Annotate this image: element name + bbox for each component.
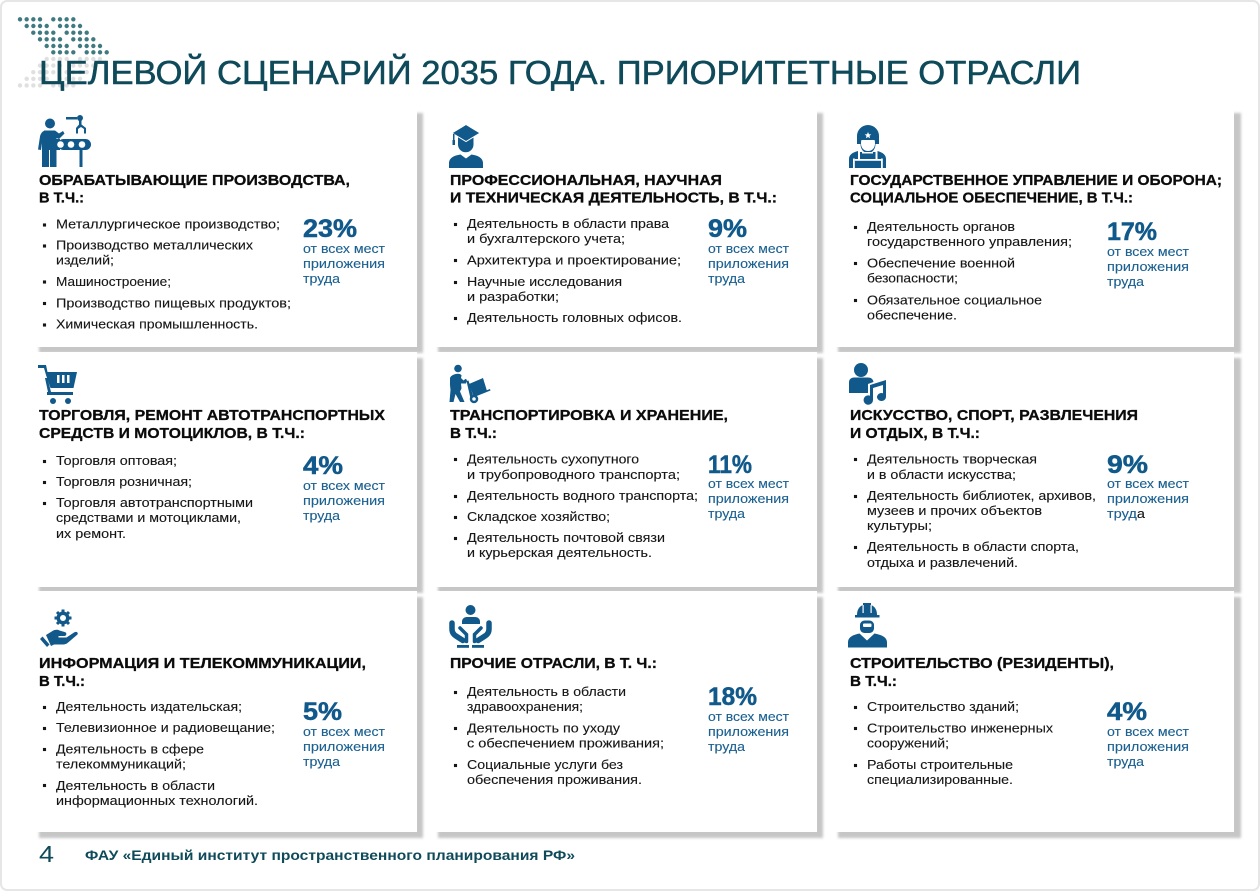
list: и в области искусства;: [867, 467, 1016, 482]
stat: 4%: [303, 452, 343, 480]
list: Деятельность сухопутного: [467, 452, 639, 466]
list: обеспечение.: [867, 308, 957, 322]
list: Деятельность водного транспорта;: [467, 488, 698, 503]
heading: [450, 407, 728, 442]
heading: ГОСУДАРСТВЕННОЕ УПРАВЛЕНИЕ И ОБОРОНА;: [850, 172, 1222, 189]
heading: В Т.Ч.:: [450, 425, 497, 442]
stat: 9%: [1107, 451, 1148, 479]
heading: ТОРГОВЛЯ, РЕМОНТ АВТОТРАНСПОРТНЫХ: [39, 407, 385, 424]
icon: graduate: [449, 124, 483, 168]
stat: приложения: [708, 724, 789, 739]
stat: 23%: [303, 215, 357, 243]
heading: СОЦИАЛЬНОЕ ОБЕСПЕЧЕНИЕ, В Т.Ч.:: [850, 190, 1133, 206]
stat: от всех мест: [1107, 244, 1189, 259]
icon: soldier: [849, 125, 886, 168]
list: Деятельность органов: [867, 219, 1015, 234]
list: средствами и мотоциклами,: [56, 510, 241, 525]
list: [454, 216, 682, 325]
stat: труда: [1107, 754, 1145, 769]
stat: от всех мест: [708, 241, 789, 256]
list: специализированные.: [867, 772, 1013, 787]
stat: 18%: [708, 683, 757, 711]
list: Торговля автотранспортными: [56, 495, 253, 510]
title: ЦЕЛЕВОЙ СЦЕНАРИЙ 2035 ГОДА. ПРИОРИТЕТНЫЕ ОТРАСЛИ: [39, 54, 1081, 91]
list: [454, 452, 698, 560]
stat: приложения: [303, 256, 385, 271]
list: Социальные услуги без: [467, 757, 623, 772]
heading: [850, 655, 1114, 690]
stat: [708, 451, 789, 521]
list: отдыха и развлечений.: [867, 555, 1018, 570]
stat: труда: [708, 739, 746, 754]
list: Деятельность почтовой связи: [467, 530, 665, 545]
stat: от всех мест: [303, 724, 385, 739]
stat: [1107, 451, 1189, 521]
stat: 11%: [708, 451, 752, 479]
stat: приложения: [303, 739, 385, 754]
list: Торговля розничная;: [56, 474, 192, 489]
icon: mover with cart: [450, 365, 490, 402]
stat: от всех мест: [1107, 476, 1189, 491]
stat: 9%: [708, 215, 747, 243]
list: и разработки;: [467, 289, 559, 304]
list: Обязательное социальное: [867, 292, 1042, 308]
list: Деятельность в области: [56, 778, 215, 793]
list: их ремонт.: [56, 526, 126, 541]
list: Деятельность в области: [467, 684, 626, 699]
list: Деятельность библиотек, архивов,: [867, 488, 1096, 503]
list: Производство металлических: [56, 238, 254, 252]
stat: труда: [708, 506, 746, 521]
list: с обеспечением проживания;: [467, 736, 664, 750]
stat: труда: [303, 754, 341, 769]
list: Обеспечение военной: [867, 256, 1015, 270]
list: Строительство зданий;: [867, 699, 1019, 714]
list: здравоохранения;: [467, 699, 583, 714]
list: Деятельность творческая: [867, 452, 1037, 466]
heading: И ТЕХНИЧЕСКАЯ ДЕЯТЕЛЬНОСТЬ, В Т.Ч.:: [450, 190, 777, 206]
heading: В Т.Ч.:: [39, 673, 85, 690]
stat: приложения: [708, 491, 789, 506]
stat: от всех мест: [708, 709, 789, 724]
list: обеспечения проживания.: [467, 772, 642, 787]
stat: труда: [708, 271, 746, 286]
list: [43, 699, 275, 808]
stat: [1107, 218, 1189, 289]
stat: 17%: [1107, 218, 1157, 246]
list: [43, 453, 253, 541]
heading: ПРОЧИЕ ОТРАСЛИ, В Т. Ч.:: [450, 655, 657, 672]
footer text: ФАУ «Единый институт пространственного планирования РФ»: [85, 847, 575, 863]
stat: приложения: [708, 256, 789, 271]
list: [454, 684, 664, 787]
list: телекоммуникаций;: [56, 756, 186, 772]
list: [854, 452, 1096, 570]
panel: IT: [33, 591, 423, 838]
list: государственного управления;: [867, 234, 1072, 249]
heading: [850, 407, 1138, 442]
icon: hand with gear: [40, 610, 78, 647]
list: Деятельность в области спорта,: [867, 539, 1079, 554]
icon: person and music note: [849, 363, 886, 405]
list: и бухгалтерского учета;: [467, 231, 625, 246]
stat: приложения: [1107, 739, 1189, 754]
list: [854, 699, 1054, 787]
list: Производство пищевых продуктов;: [56, 296, 291, 310]
heading: И ОТДЫХ, В Т.Ч.:: [850, 425, 980, 442]
list: Химическая промышленность.: [56, 316, 258, 332]
stat: [708, 683, 789, 754]
list: и курьерская деятельность.: [467, 545, 652, 560]
list: [43, 216, 291, 332]
page number: 4: [39, 841, 54, 867]
panel: transport: [432, 352, 823, 593]
panel: professional: [432, 107, 823, 353]
list: [854, 219, 1072, 322]
list: музеев и прочих объектов: [867, 503, 1042, 518]
list: безопасности;: [867, 270, 958, 286]
list: Научные исследования: [467, 274, 622, 289]
list: Телевизионное и радиовещание;: [56, 720, 275, 735]
heading: [450, 172, 777, 206]
list: Деятельность по уходу: [467, 720, 621, 736]
stat: [303, 452, 385, 523]
list: и трубопроводного транспорта;: [467, 467, 680, 482]
list: культуры;: [867, 518, 932, 533]
list: Деятельность в области права: [467, 216, 670, 231]
list: сооружений;: [867, 736, 949, 750]
stat: от всех мест: [708, 476, 789, 491]
stat: 5%: [303, 698, 342, 726]
stat: приложения: [1107, 259, 1189, 274]
stat: [708, 215, 789, 286]
stat: труда: [303, 508, 341, 523]
list: Деятельность издательская;: [56, 699, 242, 714]
stat: труда: [303, 271, 341, 286]
stat: 4%: [1107, 698, 1147, 726]
icon: worker at conveyor: [38, 115, 91, 167]
heading: [39, 655, 366, 690]
heading: В Т.Ч.:: [850, 673, 897, 690]
stat: [1107, 698, 1189, 769]
icon: shopping cart: [38, 365, 77, 404]
panel: government: [832, 107, 1241, 353]
list: Металлургическое производство;: [56, 216, 280, 232]
list: Работы строительные: [867, 757, 1013, 772]
panel: arts: [832, 352, 1241, 593]
heading: [850, 172, 1222, 206]
panel: trade: [33, 352, 423, 593]
heading: ТРАНСПОРТИРОВКА И ХРАНЕНИЕ,: [450, 407, 728, 424]
panel: manufacturing: [33, 107, 423, 353]
heading: ИСКУССТВО, СПОРТ, РАЗВЛЕЧЕНИЯ: [850, 407, 1138, 424]
list: Деятельность головных офисов.: [467, 310, 682, 325]
stat: приложения: [303, 493, 385, 508]
icon: builder: [848, 603, 887, 648]
list: Складское хозяйство;: [467, 509, 610, 524]
icon: hands holding person: [452, 605, 489, 648]
heading: [39, 172, 350, 206]
stat: труда: [1107, 506, 1146, 521]
heading: СРЕДСТВ И МОТОЦИКЛОВ, В Т.Ч.:: [39, 425, 305, 442]
heading: [39, 407, 385, 442]
list: Архитектура и проектирование;: [467, 252, 681, 268]
list: Машиностроение;: [56, 274, 171, 289]
list: Деятельность в сфере: [56, 742, 204, 756]
stat: [303, 215, 385, 286]
stat: от всех мест: [1107, 724, 1189, 739]
list: изделий;: [56, 252, 114, 268]
stat: труда: [1107, 274, 1145, 289]
icon detail: helmet star: [865, 132, 871, 138]
list: Торговля оптовая;: [56, 453, 177, 468]
stat: от всех мест: [303, 478, 385, 493]
heading: ОБРАБАТЫВАЮЩИЕ ПРОИЗВОДСТВА,: [39, 172, 350, 189]
heading: ПРОФЕССИОНАЛЬНАЯ, НАУЧНАЯ: [450, 172, 722, 189]
heading: В Т.Ч.:: [39, 190, 84, 206]
heading: СТРОИТЕЛЬСТВО (РЕЗИДЕНТЫ),: [850, 655, 1114, 672]
decorative dot pattern: [20, 19, 107, 85]
panel: construction: [832, 591, 1241, 838]
list: информационных технологий.: [56, 793, 258, 808]
stat: [303, 698, 385, 769]
stat: от всех мест: [303, 241, 385, 256]
list: Строительство инженерных: [867, 720, 1054, 736]
panel: other: [432, 591, 823, 838]
stat: приложения: [1107, 491, 1189, 506]
heading: ИНФОРМАЦИЯ И ТЕЛЕКОММУНИКАЦИИ,: [39, 655, 366, 672]
